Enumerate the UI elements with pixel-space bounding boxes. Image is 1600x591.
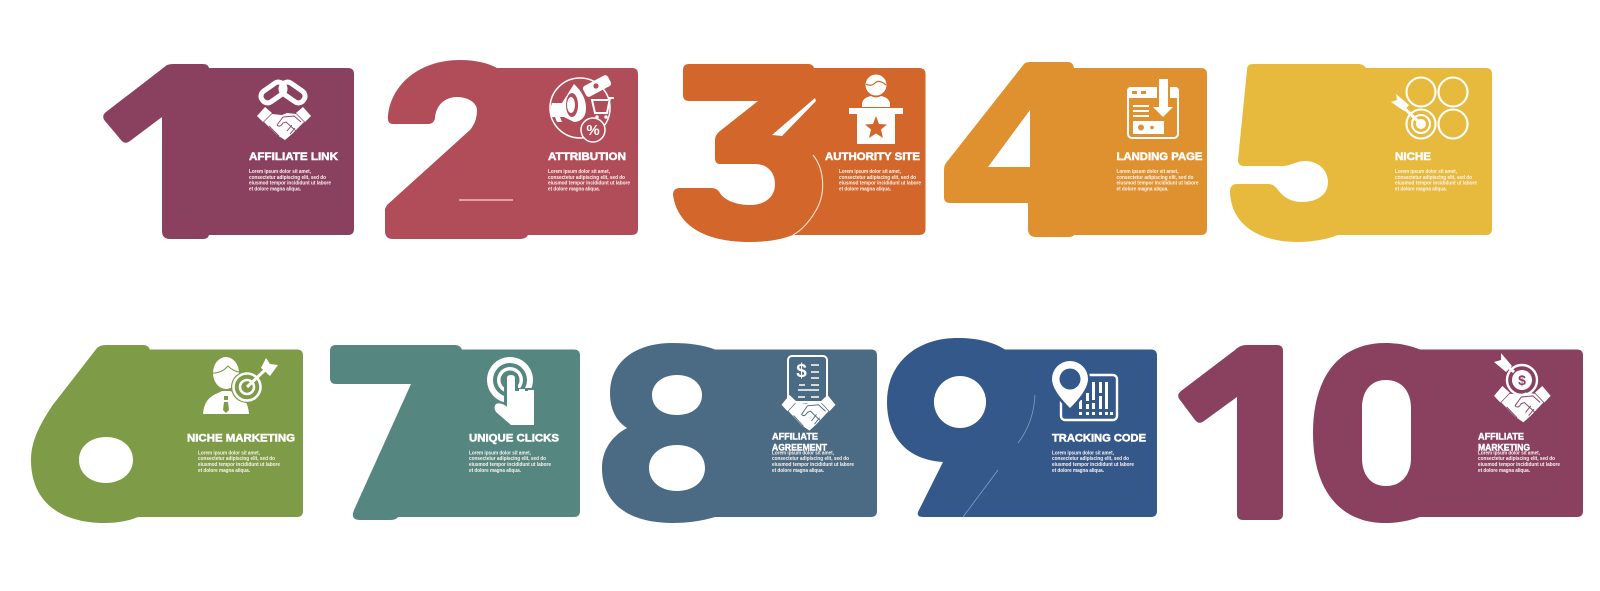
body text: Lorem ipsum dolor sit amet, bbox=[198, 450, 260, 456]
body text bbox=[198, 450, 280, 474]
body text: eiusmod tempor incididunt ut labore bbox=[839, 181, 921, 187]
icon: target coin with handshake: $ bbox=[1518, 372, 1526, 388]
panel 3: authority site bbox=[673, 64, 926, 242]
icon: businessman with target bbox=[203, 357, 278, 414]
body text: et dolore magna aliqua. bbox=[198, 468, 250, 474]
body text: Lorem ipsum dolor sit amet, bbox=[839, 169, 901, 175]
title: TRACKING CODE bbox=[1052, 432, 1147, 444]
body text: consectetur adipiscing elit, sed do bbox=[548, 175, 626, 181]
body text: consectetur adipiscing elit, sed do bbox=[198, 456, 276, 462]
icon: contract with handshake bbox=[782, 356, 836, 431]
title bbox=[772, 432, 827, 454]
body text: et dolore magna aliqua. bbox=[249, 186, 301, 192]
icon: location pin and code bars bbox=[1050, 359, 1117, 420]
icon: hand clicking target bbox=[487, 357, 538, 430]
numeral 3 with panel bbox=[673, 64, 926, 242]
body text: consectetur adipiscing elit, sed do bbox=[469, 456, 547, 462]
body text: Lorem ipsum dolor sit amet, bbox=[548, 169, 610, 175]
panel 8: affiliate agreement bbox=[602, 343, 877, 523]
numeral 0 of 10 with panel bbox=[1313, 343, 1583, 523]
title: NICHE MARKETING bbox=[187, 432, 295, 444]
body text: et dolore magna aliqua. bbox=[1116, 186, 1169, 192]
title: AGREEMENT bbox=[772, 442, 827, 454]
icon: megaphone, tag, cart and percent: % bbox=[586, 122, 600, 139]
panel 4: landing page bbox=[944, 62, 1207, 237]
body text bbox=[469, 450, 551, 474]
body text: eiusmod tempor incididunt ut labore bbox=[249, 181, 331, 187]
body text: consectetur adipiscing elit, sed do bbox=[772, 456, 850, 462]
body text: Lorem ipsum dolor sit amet, bbox=[249, 169, 311, 175]
title: AFFILIATE bbox=[1478, 432, 1525, 442]
white slit and arc in numeral bbox=[772, 98, 823, 235]
body text: consectetur adipiscing elit, sed do bbox=[1395, 175, 1473, 181]
body text: et dolore magna aliqua. bbox=[1052, 468, 1104, 474]
body text: et dolore magna aliqua. bbox=[772, 468, 824, 474]
panel 10: affiliate marketing bbox=[1178, 343, 1583, 523]
panel 9: tracking code bbox=[887, 338, 1157, 517]
body text bbox=[1116, 169, 1198, 192]
body text: eiusmod tempor incididunt ut labore bbox=[1395, 181, 1477, 187]
panel 2: attribution bbox=[385, 60, 638, 239]
body text: et dolore magna aliqua. bbox=[1395, 186, 1447, 192]
body text: et dolore magna aliqua. bbox=[1478, 468, 1530, 474]
body text: eiusmod tempor incididunt ut labore bbox=[1052, 462, 1134, 468]
panel 6: niche marketing bbox=[31, 345, 303, 523]
numeral 2 with panel bbox=[385, 60, 638, 239]
body text: et dolore magna aliqua. bbox=[839, 186, 891, 192]
title bbox=[1478, 432, 1530, 454]
body text: consectetur adipiscing elit, sed do bbox=[1116, 175, 1194, 181]
body text: Lorem ipsum dolor sit amet, bbox=[1116, 169, 1179, 175]
body text: et dolore magna aliqua. bbox=[548, 186, 600, 192]
body text: consectetur adipiscing elit, sed do bbox=[839, 175, 917, 181]
icon: circles with target and arrow bbox=[1391, 78, 1468, 138]
thin highlight lines in numeral bbox=[963, 395, 1035, 517]
body text: consectetur adipiscing elit, sed do bbox=[1478, 456, 1556, 462]
numeral 1 with panel bbox=[103, 64, 354, 239]
body text: consectetur adipiscing elit, sed do bbox=[249, 175, 327, 181]
icon: browser window with download arrow bbox=[1127, 79, 1179, 138]
body text bbox=[839, 169, 921, 192]
numeral 4 with panel bbox=[944, 62, 1207, 237]
title: ATTRIBUTION bbox=[548, 151, 626, 163]
body text: eiusmod tempor incididunt ut labore bbox=[548, 181, 630, 187]
body text: Lorem ipsum dolor sit amet, bbox=[772, 450, 834, 456]
body text bbox=[548, 169, 630, 192]
title: LANDING PAGE bbox=[1116, 151, 1203, 163]
body text bbox=[1478, 450, 1560, 474]
numeral 9 with panel bbox=[887, 338, 1157, 517]
title: UNIQUE CLICKS bbox=[469, 432, 560, 444]
numeral 5 with panel bbox=[1230, 64, 1492, 242]
body text: Lorem ipsum dolor sit amet, bbox=[1395, 169, 1457, 175]
body text: eiusmod tempor incididunt ut labore bbox=[198, 462, 280, 468]
panel 7: unique clicks bbox=[330, 345, 580, 520]
body text: eiusmod tempor incididunt ut labore bbox=[469, 462, 551, 468]
title: AFFILIATE LINK bbox=[249, 151, 338, 163]
panel 5: niche bbox=[1230, 64, 1492, 242]
body text: et dolore magna aliqua. bbox=[469, 468, 521, 474]
body text bbox=[1052, 450, 1134, 474]
title: MARKETING bbox=[1478, 442, 1530, 454]
body text: consectetur adipiscing elit, sed do bbox=[1052, 456, 1130, 462]
numeral 8 with panel bbox=[602, 343, 877, 523]
numeral 7 with panel bbox=[330, 345, 580, 520]
body text: eiusmod tempor incididunt ut labore bbox=[1116, 181, 1198, 187]
white line in numeral bbox=[459, 199, 513, 201]
numeral 6 with panel bbox=[31, 345, 303, 523]
body text bbox=[249, 169, 331, 192]
title: AFFILIATE bbox=[772, 432, 819, 442]
body text: Lorem ipsum dolor sit amet, bbox=[469, 450, 531, 456]
body text: Lorem ipsum dolor sit amet, bbox=[1478, 450, 1540, 456]
body text: Lorem ipsum dolor sit amet, bbox=[1052, 450, 1114, 456]
body text: eiusmod tempor incididunt ut labore bbox=[772, 462, 854, 468]
icon: chain and handshake bbox=[257, 80, 311, 140]
panel 1: affiliate link bbox=[103, 64, 354, 239]
title: AUTHORITY SITE bbox=[825, 151, 921, 163]
icon: person at podium bbox=[849, 74, 903, 144]
icon: megaphone, tag, cart and percent bbox=[550, 74, 614, 142]
body text bbox=[1395, 169, 1477, 192]
icon: target coin with handshake bbox=[1494, 353, 1551, 422]
icon: contract with handshake: $ bbox=[796, 361, 807, 382]
numeral 1 of 10 bbox=[1178, 345, 1283, 520]
body text bbox=[772, 450, 854, 474]
body text: eiusmod tempor incididunt ut labore bbox=[1478, 462, 1560, 468]
title: NICHE bbox=[1395, 151, 1432, 163]
